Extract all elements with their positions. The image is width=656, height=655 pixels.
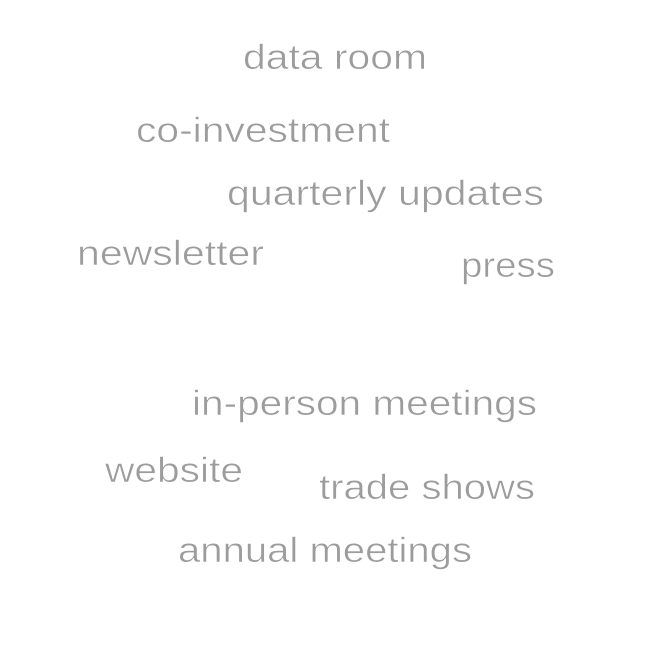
word: co-investment: co-investment: [136, 111, 390, 150]
word: trade shows: trade shows: [319, 468, 535, 507]
word: quarterly updates: quarterly updates: [227, 174, 544, 213]
word: annual meetings: annual meetings: [178, 531, 472, 570]
word: in-person meetings: in-person meetings: [192, 384, 537, 423]
word: data room: data room: [243, 38, 427, 77]
word: newsletter: newsletter: [77, 234, 264, 273]
word: press: press: [461, 246, 555, 285]
word: website: website: [104, 451, 243, 490]
